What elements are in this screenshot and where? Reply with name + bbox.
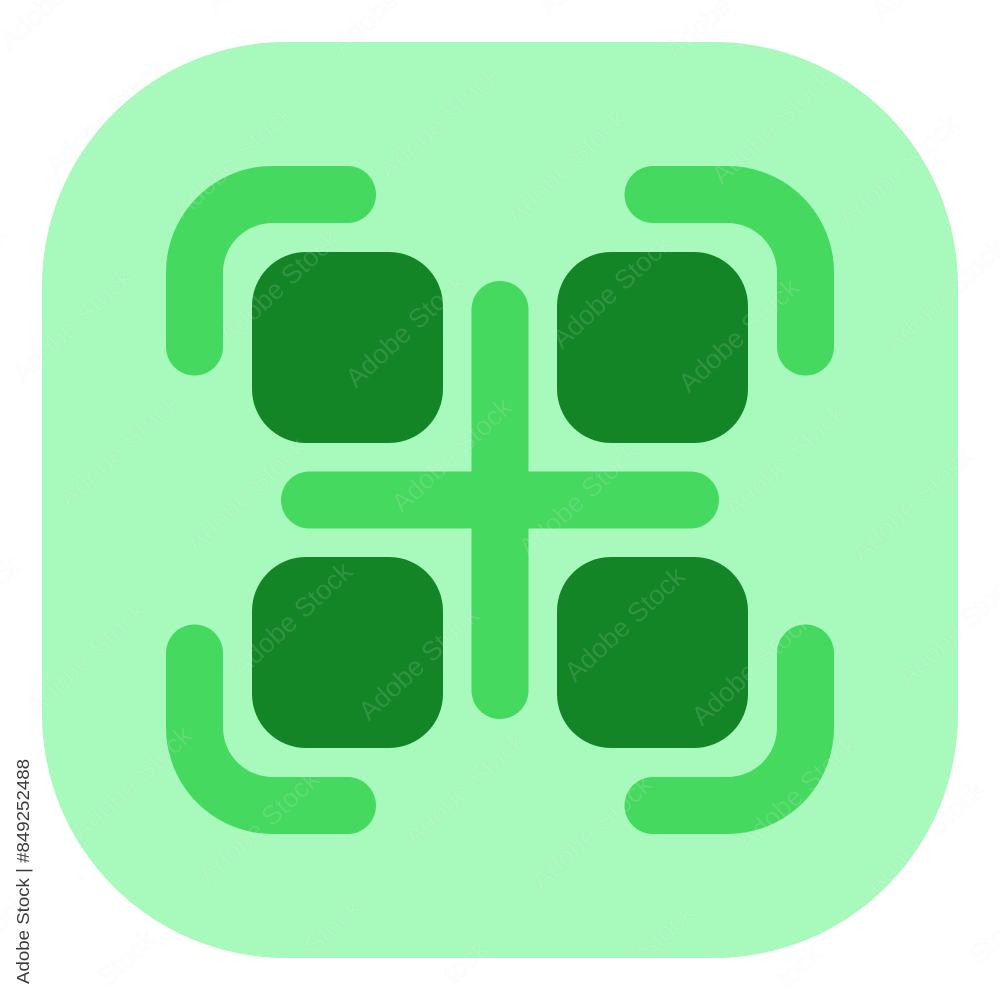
stock watermark pattern: Adobe Stock: [833, 108, 965, 234]
stock watermark pattern: Adobe Stock: [513, 436, 645, 562]
center plus sign: [281, 281, 719, 719]
stock watermark pattern: Adobe Stock: [53, 387, 185, 513]
stock watermark pattern: Adobe Stock: [719, 397, 851, 523]
stock watermark pattern: Adobe Stock: [706, 64, 838, 190]
stock watermark pattern: Adobe Stock: [399, 725, 531, 851]
stock watermark pattern: Stock: [631, 897, 701, 965]
stock watermark pattern: Adobe Stock: [732, 730, 864, 856]
stock watermark pattern: Adobe Stock: [7, 262, 139, 388]
stock watermark pattern: Adobe Stock: [193, 764, 325, 890]
stock watermark pattern: Adobe Stock: [167, 98, 299, 224]
stock watermark pattern: Adobe Stock: [500, 103, 632, 229]
stock watermark pattern: Adobe Stock: [226, 556, 358, 682]
stock watermark pattern: Adobe Stock: [859, 774, 991, 900]
stock watermark pattern: Stock: [92, 924, 162, 992]
stock watermark pattern: Adobe Stock: [546, 228, 678, 354]
stock watermark pattern: Adobe Stock: [66, 720, 198, 846]
QR modules: four dark squares: [252, 252, 748, 748]
stock watermark pattern: Adobe Stock: [846, 441, 978, 567]
stock watermark pattern: Adobe Stock: [213, 223, 345, 349]
stock watermark pattern: Adobe Stock: [386, 392, 518, 518]
stock image credit and number: Adobe Stock | #849252488: [13, 759, 33, 984]
scan frame corners: [194, 194, 806, 806]
stock watermark pattern: Adobe Stock: [20, 595, 152, 721]
stock watermark pattern: Adobe Stock: [373, 59, 505, 185]
stock watermark pattern: Adobe Stock: [340, 267, 472, 393]
stock watermark pattern: tock: [771, 938, 828, 994]
stock watermark pattern: Adobe Stock: [686, 605, 818, 731]
stock watermark pattern: Adobe Stock: [673, 272, 805, 398]
stock watermark pattern: tock: [438, 933, 495, 989]
stock watermark pattern: Adobe Stock: [40, 54, 172, 180]
stock watermark pattern: Stock: [298, 892, 368, 960]
stock watermark pattern: Adobe Stock: [559, 561, 691, 687]
stock watermark pattern: Adobe Stock: [180, 431, 312, 557]
stock watermark pattern: Adobe Stock: [526, 769, 658, 895]
stock watermark pattern: Adobe Stock: [353, 600, 485, 726]
